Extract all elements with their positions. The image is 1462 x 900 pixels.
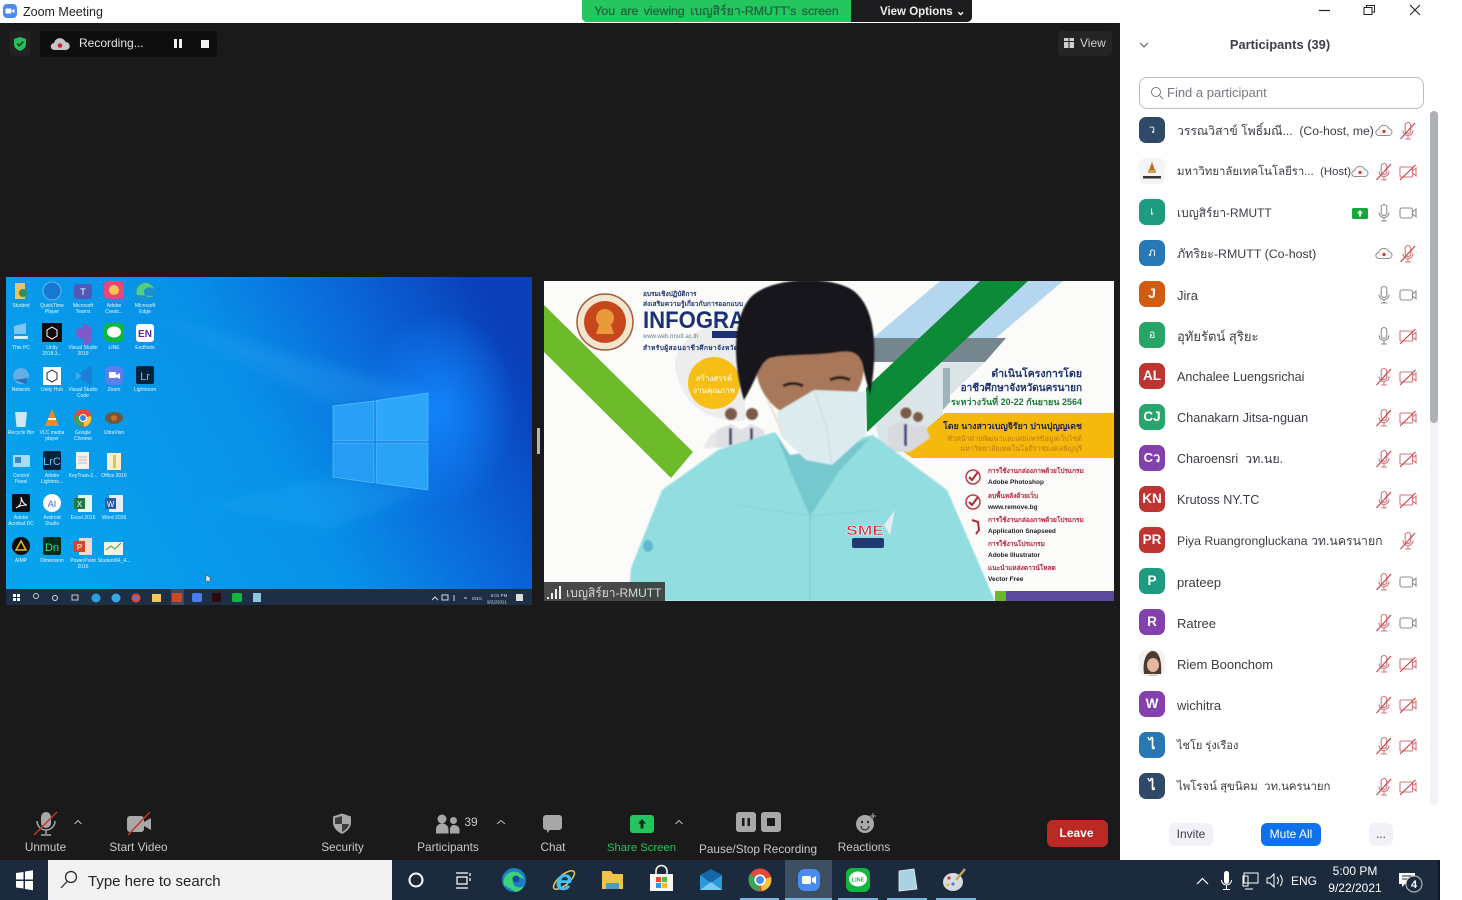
- participant: wichitra: [1139, 691, 1417, 717]
- leave button: Leave: [1059, 826, 1094, 840]
- scrollbar: [1430, 111, 1438, 805]
- desktop icons: Lightroo...: [41, 479, 63, 485]
- name: Anchalee Luengsrichai: [1177, 370, 1304, 384]
- organiser text: มหาวิทยาลัยเทคโนโลยีราชมงคลธัญบุรี: [960, 444, 1082, 453]
- participant: เบญสิร์ยา: [1139, 199, 1417, 225]
- checklist: Adobe Photoshop: [988, 479, 1044, 486]
- shirt: [629, 432, 995, 601]
- participants control: 39: [464, 815, 478, 829]
- students photo right: [888, 408, 930, 452]
- desktop icons: X: [77, 500, 83, 509]
- status icons: [1352, 204, 1417, 222]
- desktop icons: T: [80, 287, 86, 297]
- name: ไชโย รุ่งเรือง: [1177, 740, 1238, 752]
- system tray: 9/22/2021: [1328, 881, 1382, 895]
- status icons: [1375, 122, 1416, 140]
- search box: Type here to search: [88, 873, 221, 890]
- recording label: Recording...: [79, 36, 144, 50]
- desktop taskbar: [6, 589, 532, 605]
- participant: ภัทริยะ: [1139, 240, 1416, 266]
- icon: chrome: [748, 868, 772, 892]
- status icons: [1378, 327, 1417, 344]
- avatar: photo: [1139, 650, 1165, 676]
- button: invite: [1169, 823, 1213, 846]
- desktop icons: Teams: [76, 309, 91, 315]
- desktop icons: Microsoft: [135, 303, 156, 309]
- organiser text: [942, 367, 1082, 453]
- panel: participants: [1120, 0, 1462, 860]
- status icons: [1400, 532, 1416, 550]
- participant: ไพโรจน์: [1120, 766, 1430, 807]
- notification centre: 4: [1411, 879, 1418, 891]
- checklist: Vector Free: [988, 576, 1024, 583]
- desktop icons: Dimension: [40, 558, 64, 564]
- name: Chanakarn Jitsa-nguan: [1177, 411, 1308, 425]
- avatar: [1139, 363, 1165, 389]
- recording status: [40, 31, 217, 57]
- desktop icons: Android: [43, 515, 61, 521]
- desktop icons: 2018.3...: [42, 351, 62, 357]
- panel heading: Participants (39): [1230, 37, 1330, 52]
- desktop icons: W: [107, 500, 115, 509]
- avatar: J: [1148, 286, 1156, 301]
- title bar: [0, 0, 1120, 23]
- collapse chevron: [1140, 42, 1148, 48]
- desktop icons: Dn: [45, 542, 59, 554]
- desktop icons: Unity Hub: [41, 387, 63, 393]
- participant: Riem: [1139, 650, 1417, 676]
- desktop icons: 2016: [77, 564, 89, 570]
- icon: mail: [700, 869, 722, 890]
- desktop taskbar: 9/22/2021: [487, 600, 508, 604]
- yellow badge: งานคุณภาพ: [693, 386, 735, 395]
- participants control: [417, 814, 505, 854]
- avatar: เ: [1150, 206, 1154, 218]
- participant: Piya: [1139, 527, 1416, 553]
- infographic heading: ส่งเสริมความรู้เกี่ยวกับการออกแบบ: [643, 298, 743, 309]
- name tag: เบญสิร์ยา-RMUTT: [566, 586, 662, 600]
- organiser text: ระหว่างวันที่ 20-22 กันยายน 2564: [951, 395, 1082, 407]
- status icons: [1348, 766, 1420, 807]
- avatar: KN: [1142, 491, 1162, 506]
- desktop icons: Edge: [139, 309, 151, 315]
- shared screen: windows desktop: [6, 277, 532, 605]
- desktop icons: Excel 2016: [71, 515, 96, 521]
- desktop icons: P: [77, 543, 82, 552]
- status icons: [1376, 409, 1417, 426]
- scrollbar thumb: [1430, 111, 1438, 423]
- participant: Krutoss: [1139, 486, 1417, 512]
- desktop icons: Studio: [45, 521, 59, 527]
- name: มหาวิทยาลัยเทคโนโลยีรา... (Host): [1177, 166, 1351, 178]
- desktop icons: Visual Studio: [68, 387, 98, 393]
- organiser text: โดย นางสาวเบญจิรัยา ปานปุญญเดช: [942, 420, 1082, 432]
- button: mute all: [1261, 823, 1321, 846]
- infographic logo: [577, 294, 633, 350]
- desktop icons: Chrome: [74, 436, 92, 442]
- search box: [48, 860, 392, 900]
- unmute control: Unmute: [25, 840, 67, 854]
- desktop icons: KeyTrain-2...: [69, 473, 97, 479]
- name tag: [544, 582, 665, 601]
- desktop icons: QuickTime: [40, 303, 64, 309]
- infographic heading: [642, 290, 745, 353]
- avatar: ไ: [1149, 778, 1155, 793]
- participant: มหาวิทยาลัย host: [1139, 158, 1417, 184]
- avatar: [1139, 240, 1165, 266]
- avatar: [1139, 117, 1165, 143]
- reactions control: Reactions: [838, 840, 890, 854]
- icon: notepad: [899, 869, 917, 891]
- organiser text: ดำเนินโครงการโดย: [991, 367, 1082, 380]
- desktop icons: Zoom: [108, 387, 120, 393]
- hair: [736, 280, 874, 400]
- desktop icons: Student: [12, 303, 30, 309]
- avatar: CJ: [1143, 409, 1161, 424]
- windows taskbar: [0, 860, 1440, 900]
- icon: stop: [201, 40, 209, 48]
- desktop icons: Adobe: [14, 515, 28, 521]
- window title: Zoom Meeting: [23, 5, 103, 19]
- name: Piya Ruangrongluckana วท.นครนายก: [1177, 534, 1383, 548]
- avatar: [1139, 281, 1165, 307]
- participant: ไชโย: [1120, 725, 1430, 766]
- desktop icons: AI: [48, 499, 56, 509]
- checklist: การใช้งานกล่องภาพด้วยโปรแกรม: [988, 515, 1084, 524]
- checklist: การใช้งานโปรแกรม: [988, 539, 1045, 548]
- desktop icons: AIMP: [15, 558, 28, 564]
- participant: prateep: [1139, 568, 1417, 594]
- checklist: www.remove.bg: [987, 504, 1038, 511]
- desktop icons: Recycle Bin: [8, 430, 34, 436]
- avatar: [1139, 486, 1165, 512]
- icon: file explorer: [602, 871, 623, 889]
- participant: Anchalee: [1139, 363, 1417, 389]
- avatar: [1139, 773, 1165, 799]
- desktop icons: 2019: [77, 351, 89, 357]
- desktop icons: Unity: [46, 345, 58, 351]
- avatar: [1139, 445, 1165, 471]
- button: mute all: Mute All: [1270, 827, 1312, 841]
- shared video: presenter over infographic background: [544, 281, 1114, 601]
- chat control: Chat: [541, 840, 566, 854]
- name: วรรณวิสาข์ โพธิ์มณี... (Co-host, me): [1177, 124, 1374, 138]
- head: [756, 310, 864, 420]
- name: Krutoss NY.TC: [1177, 493, 1259, 507]
- system tray: 5:00 PM: [1333, 864, 1377, 878]
- name: prateep: [1177, 575, 1221, 590]
- desktop taskbar: 5:01 PM: [491, 593, 508, 598]
- chat control: [541, 815, 566, 854]
- desktop icons: Creati...: [105, 309, 123, 315]
- name: Jira: [1177, 288, 1198, 303]
- security control: [321, 814, 364, 854]
- desktop icons: EN: [138, 329, 152, 340]
- desktop icons: Adobe: [45, 473, 59, 479]
- status icons: [1376, 573, 1417, 590]
- avatar: P: [1147, 573, 1156, 588]
- banner message: You are viewing เบญสิร์ยา-RMUTT's screen: [594, 4, 839, 18]
- avatar: university logo: [1139, 158, 1165, 184]
- avatar: PR: [1143, 532, 1161, 547]
- avatar: [1139, 322, 1165, 348]
- search box: [1139, 77, 1424, 109]
- name: ภัทริยะ-RMUTT (Co-host): [1177, 247, 1316, 261]
- students photo left: [703, 408, 766, 448]
- organiser text: อาชีวศึกษาจังหวัดนครนายก: [961, 382, 1082, 394]
- checklist: Application Snapseed: [988, 528, 1056, 535]
- share screen control: Share Screen: [607, 842, 676, 854]
- reactions control: [838, 813, 890, 854]
- desktop icons: Lightroom: [134, 387, 156, 393]
- checklist: [966, 466, 1084, 583]
- avatar: [1139, 568, 1165, 594]
- icon: zoom app: [3, 4, 17, 18]
- checklist: การใช้งานกล่องภาพด้วยโปรแกรม: [988, 466, 1084, 475]
- icon: search: [1151, 87, 1164, 100]
- name: Riem Boonchom: [1177, 657, 1273, 672]
- status icons: [1376, 368, 1417, 386]
- desktop icons: Code: [77, 393, 89, 399]
- avatar: [1139, 609, 1165, 635]
- security shield: [9, 31, 31, 56]
- icon: edge: [502, 868, 526, 892]
- yellow badge: [688, 357, 740, 409]
- cortana: [410, 874, 422, 886]
- system tray: [1197, 864, 1382, 895]
- participant: วรรณวิสาข์: [1139, 117, 1416, 143]
- icon: grid: [1064, 38, 1074, 48]
- name: Charoensri วท.นย.: [1177, 452, 1283, 466]
- desktop icons: Panel: [15, 479, 27, 485]
- desktop icons: Lr: [140, 371, 150, 383]
- avatar: [1139, 527, 1165, 553]
- system tray: ENG: [1291, 874, 1317, 888]
- participant: Ratree: [1139, 609, 1417, 635]
- status icons: [1376, 491, 1417, 508]
- running app indicators: [740, 898, 976, 900]
- desktop icons: LrC: [43, 456, 61, 468]
- desktop icons: EndNote: [135, 345, 155, 351]
- name: wichitra: [1177, 698, 1221, 713]
- search placeholder: Find a participant: [1167, 85, 1267, 100]
- avatar: ไ: [1149, 737, 1155, 752]
- icon: internet explorer: [551, 864, 577, 897]
- status icons: [1348, 725, 1420, 766]
- participant: Jira: [1139, 281, 1417, 307]
- icon: paint: [943, 869, 965, 891]
- viewing banner: [582, 0, 972, 22]
- infographic heading: สำหรับผู้สอนอาชีวศึกษาจังหวัด: [643, 343, 738, 353]
- background shapes: [544, 281, 1114, 601]
- icon: pause: [174, 39, 182, 48]
- button: more: [1369, 823, 1393, 846]
- avatar: อ: [1149, 329, 1155, 341]
- infographic heading: INFOGRA: [643, 307, 745, 334]
- icon: store: [650, 866, 673, 891]
- desktop icons: player: [45, 436, 59, 442]
- security control: Security: [321, 840, 364, 854]
- desktop icons: [8, 281, 156, 570]
- desktop icons: Google: [75, 430, 91, 436]
- name: อุทัยรัตน์ สุริยะ: [1177, 329, 1258, 344]
- view button: [1058, 31, 1112, 56]
- presenter: [629, 280, 995, 601]
- checklist: Adobe Illustrator: [988, 552, 1040, 559]
- avatar: R: [1147, 614, 1157, 629]
- status icons: [1376, 655, 1417, 672]
- desktop icons: VLC media: [40, 430, 65, 436]
- participant: อุทัยรัตน์: [1139, 322, 1417, 348]
- status icons: [1378, 286, 1417, 304]
- infographic heading: อบรมเชิงปฏิบัติการ: [643, 290, 697, 298]
- eyes: [783, 378, 850, 386]
- desktop icons: Player: [45, 309, 59, 315]
- yellow badge: สร้างสรรค์: [696, 373, 732, 383]
- start button: [16, 870, 33, 890]
- icon: zoom active: [785, 860, 832, 900]
- avatar: [1139, 691, 1165, 717]
- avatar: ภ: [1148, 247, 1156, 259]
- unmute control: [25, 812, 82, 854]
- desktop icons: Student04_4...: [98, 558, 130, 564]
- icon: line: LINE: [852, 878, 865, 884]
- name: ไพโรจน์ สุขนิคม วท.นครนายก: [1177, 781, 1330, 793]
- start video control: [109, 812, 168, 854]
- leave button: [1047, 820, 1108, 847]
- desktop taskbar: ENG: [472, 596, 482, 601]
- notification centre: [1399, 873, 1422, 892]
- windows logo: [333, 393, 428, 490]
- desktop icons: Microsoft: [73, 303, 94, 309]
- organiser text: หัวหน้าฝ่ายพัฒนาและเผยแพร่ข้อมูลเว็บไซต์: [947, 433, 1082, 443]
- status icons: [1376, 696, 1417, 714]
- shirt logo: SME: [846, 522, 884, 538]
- task view: [456, 873, 470, 888]
- icon: line: [846, 868, 870, 892]
- desktop icons: Control: [13, 473, 29, 479]
- checklist: ลบพื้นหลังด้วยเว็บ: [988, 490, 1038, 500]
- avatar: [1139, 732, 1165, 758]
- desktop icons: Adobe: [107, 303, 121, 309]
- view options: View Options ⌄: [880, 6, 965, 18]
- desktop icons: UltraViso: [104, 430, 124, 436]
- status icons: [1351, 163, 1417, 180]
- avatar: ว: [1149, 124, 1155, 136]
- meeting toolbar: [0, 800, 1120, 860]
- desktop icons: This PC: [12, 345, 30, 351]
- start video control: Start Video: [109, 840, 168, 854]
- shirt logo: [846, 510, 895, 548]
- mask: [777, 390, 866, 465]
- button: invite: Invite: [1177, 827, 1205, 841]
- desktop icons: Network: [12, 387, 31, 393]
- pause and stop recording control: [699, 812, 817, 856]
- share screen control: [607, 815, 682, 854]
- desktop icons: PowerPoint: [70, 558, 96, 564]
- checklist: แนะนำแหล่งดาวน์โหลด: [988, 563, 1056, 572]
- avatar: [1139, 404, 1165, 430]
- participant: Charoensri: [1139, 445, 1417, 471]
- button: more: ...: [1376, 827, 1386, 841]
- name: เบญสิร์ยา-RMUTT: [1177, 206, 1272, 220]
- desktop icons: LINE: [108, 345, 120, 351]
- icon: internet explorer: e: [556, 864, 572, 897]
- name: Ratree: [1177, 616, 1216, 631]
- view label: View: [1080, 36, 1106, 50]
- avatar: Cว: [1144, 450, 1160, 465]
- split handle: [537, 428, 540, 454]
- avatar: W: [1146, 696, 1158, 711]
- desktop icons: Acrobat DC: [8, 521, 34, 527]
- avatar: AL: [1143, 368, 1161, 383]
- banner message: [582, 0, 851, 22]
- status icons: [1375, 245, 1416, 262]
- infographic heading: www.web.rmutt.ac.th: [642, 334, 698, 340]
- participants control: Participants: [417, 840, 479, 854]
- cursor: [206, 575, 212, 582]
- window controls: [1319, 4, 1420, 16]
- avatar: [1139, 199, 1165, 225]
- status icons: [1376, 614, 1417, 632]
- icon: recording cloud: [50, 38, 70, 50]
- desktop icons: Word 2016: [102, 515, 126, 521]
- meeting stage: [0, 23, 1120, 800]
- desktop icons: Office 2016: [101, 473, 127, 479]
- status icons: [1376, 450, 1417, 468]
- desktop icons: Visual Studio: [68, 345, 98, 351]
- participant: Chanakarn: [1139, 404, 1417, 430]
- pause and stop recording control: Pause/Stop Recording: [699, 842, 817, 856]
